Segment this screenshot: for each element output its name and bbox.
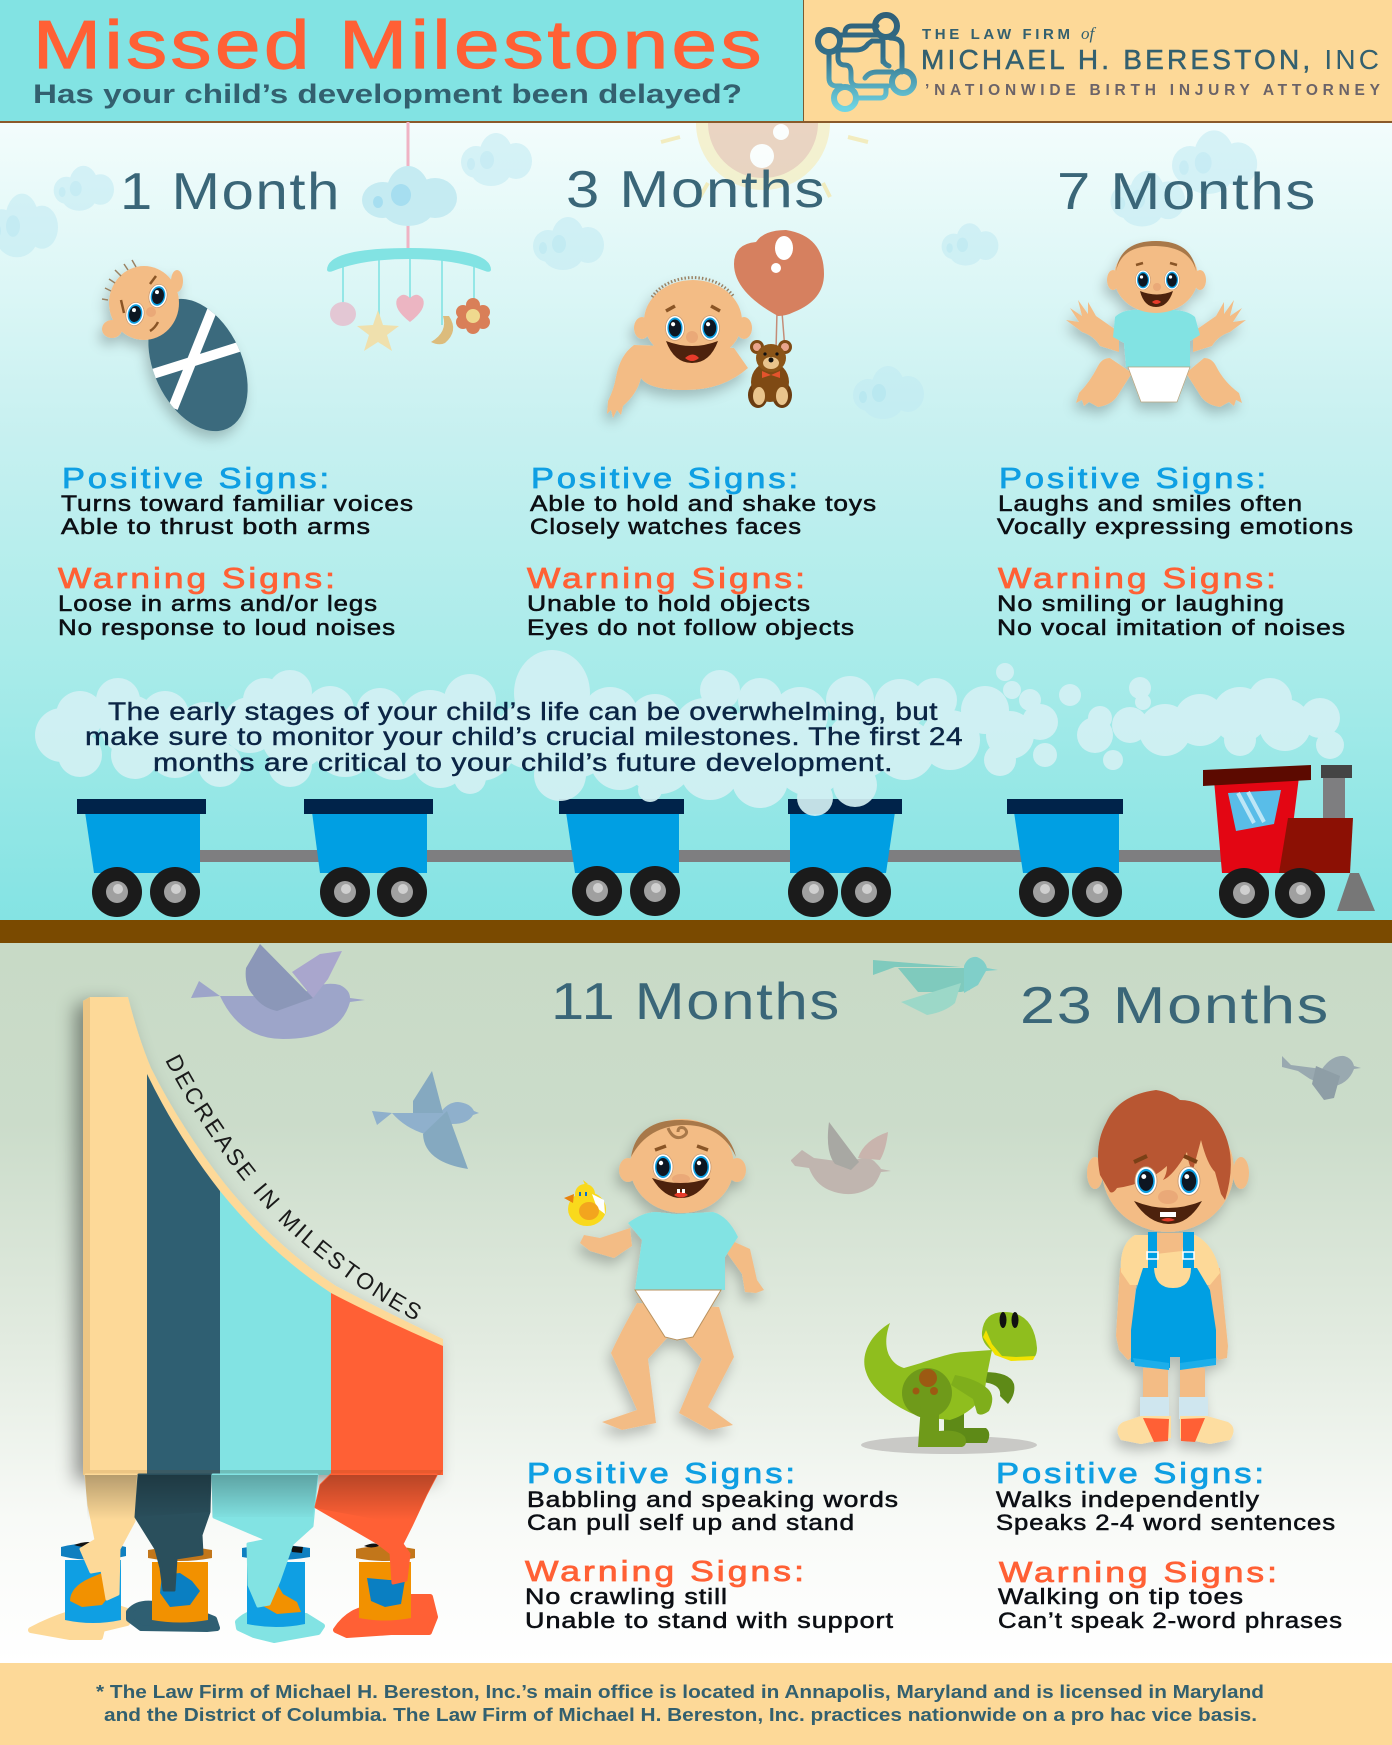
text block: 7 month signs: Laughs and smiles often <box>998 491 1303 516</box>
train car 2 <box>304 799 433 917</box>
text block: 11 month signs: Can pull self up and stand <box>527 1510 855 1535</box>
train car 5 <box>1007 799 1123 917</box>
footer panel <box>0 1663 1392 1745</box>
icon: rubber duck <box>564 1180 606 1226</box>
hip and spots <box>902 1368 952 1418</box>
cream bevel <box>83 997 147 1475</box>
footer panel: and the District of Columbia. The Law Firm of Michael H. Bereston, Inc. practices nationwide on a pro hac vice basis. <box>104 1704 1257 1725</box>
front arm <box>951 1375 992 1415</box>
ground band <box>0 920 1392 943</box>
text block: early stages paragraph: The early stages of your child’s life can be overwhelming, but <box>108 698 938 726</box>
text block: 23 month signs: Warning Signs: <box>999 1557 1280 1589</box>
text block: 1 month signs: Able to thrust both arms <box>61 514 371 539</box>
head <box>1107 241 1206 313</box>
head <box>634 278 752 363</box>
subtitle: Has your child’s development been delayed? <box>33 79 742 109</box>
text block: 7 month signs: No vocal imitation of noises <box>997 615 1346 640</box>
heading: 3 months: 3 Months <box>566 161 826 219</box>
head and hair <box>1087 1090 1249 1232</box>
text block: 3 month signs: Positive Signs: <box>531 463 801 495</box>
body and tail <box>864 1323 992 1420</box>
shirt <box>1113 310 1200 367</box>
text block: 3 month signs: Warning Signs: <box>527 563 808 595</box>
icon: balloon <box>734 230 824 350</box>
bucket 1 <box>61 1542 126 1623</box>
text block: early stages paragraph: months are critical to your child’s future development. <box>153 749 893 777</box>
text block: 7 month signs: Warning Signs: <box>998 563 1279 595</box>
text block: 23 month signs: Positive Signs: <box>996 1458 1267 1490</box>
text block: 23 month signs: Speaks 2-4 word sentences <box>996 1510 1336 1535</box>
shadow <box>861 1436 1037 1454</box>
illustration: 7 month baby <box>1066 241 1246 407</box>
text block: 1 month signs: No response to loud noises <box>58 615 396 640</box>
train car 1 <box>77 799 206 917</box>
chart: decrease in milestones <box>63 992 447 1493</box>
text block: 1 month signs: Turns toward familiar voices <box>61 491 414 516</box>
background clouds <box>0 130 1257 419</box>
illustration: swaddled 1 month baby <box>102 260 267 447</box>
text block: 11 month signs: No crawling still <box>525 1584 728 1609</box>
footer disclaimer: * The Law Firm of Michael H. Bereston, Inc.’s main office is located in Annapolis, Maryland and is licensed in Maryland <box>96 1681 1264 1702</box>
icon: purple bird <box>191 944 365 1039</box>
sky decorations: sun and clouds <box>0 123 1257 419</box>
text block: 3 month signs: Able to hold and shake toys <box>530 491 877 516</box>
legs <box>602 1303 734 1430</box>
legs <box>1076 358 1242 407</box>
text block: early stages paragraph <box>85 698 963 777</box>
illustration: 3 month baby <box>607 278 752 418</box>
bucket 2 <box>148 1547 212 1622</box>
text block: 7 month signs: Positive Signs: <box>999 463 1269 495</box>
heading: 11 months: 11 Months <box>551 973 841 1031</box>
locomotive <box>1203 765 1375 918</box>
text block: 3 month signs <box>527 463 877 640</box>
text block: 3 month signs: Closely watches faces <box>530 514 802 539</box>
smoke cloud <box>35 650 1344 816</box>
header divider <box>803 0 804 122</box>
text block: early stages paragraph: make sure to monitor your child’s crucial milestones. The first 24 <box>85 723 963 751</box>
coupling bar <box>195 850 1235 862</box>
icon: pink grey bird <box>791 1122 891 1194</box>
firm name italic of: of <box>1081 24 1096 43</box>
icon: logo knot <box>818 15 914 109</box>
curved label <box>165 1060 418 1322</box>
text block: 7 month signs: No smiling or laughing <box>997 591 1285 616</box>
text block: 3 month signs: Eyes do not follow objects <box>527 615 855 640</box>
icon: grey bird <box>1282 1056 1361 1100</box>
text block: 3 month signs: Unable to hold objects <box>527 591 811 616</box>
heading: 23 months: 23 Months <box>1020 977 1330 1035</box>
text block: 1 month signs: Loose in arms and/or legs <box>58 591 378 616</box>
icon: teal bird <box>873 957 998 1015</box>
arms and hands <box>1066 300 1246 352</box>
arms <box>1116 1268 1228 1360</box>
diaper <box>1128 367 1190 402</box>
paint buckets <box>31 1475 437 1640</box>
arms <box>580 1228 632 1258</box>
head <box>619 1119 746 1213</box>
firm tagline: ’NATIONWIDE BIRTH INJURY ATTORNEY <box>925 82 1381 99</box>
background: lower section panel <box>0 943 1392 1664</box>
bucket 4 <box>356 1544 415 1620</box>
header: law firm logo panel <box>804 0 1392 122</box>
illustration: 23 month boy <box>1087 1090 1249 1444</box>
chart: decrease in milestones: DECREASE IN MILESTONES <box>166 1054 421 1319</box>
head <box>982 1312 1037 1360</box>
heading: 1 month: 1 Month <box>120 163 341 221</box>
text block: 7 month signs: Vocally expressing emotions <box>997 514 1354 539</box>
bucket 3 <box>242 1545 310 1627</box>
icon: teddy bear <box>748 340 792 408</box>
lip shading <box>147 1470 220 1475</box>
text block: 1 month signs <box>58 463 414 640</box>
illustration: toy dinosaur <box>861 1312 1037 1454</box>
text block: 11 month signs: Positive Signs: <box>527 1458 798 1490</box>
header: title panel <box>0 0 804 122</box>
teeth <box>983 1330 1035 1361</box>
overalls <box>1131 1232 1216 1370</box>
column: cyan <box>220 1191 331 1475</box>
column body with shadow <box>83 997 443 1475</box>
back arm and leg <box>944 1372 1014 1443</box>
text block: 23 month signs: Walks independently <box>996 1487 1260 1512</box>
legs and socks <box>1143 1368 1205 1398</box>
eyes <box>1000 1312 1006 1328</box>
front leg <box>918 1405 966 1447</box>
head <box>102 260 183 340</box>
text block: 11 month signs: Babbling and speaking words <box>527 1487 899 1512</box>
paint drips <box>81 1475 437 1606</box>
body and arm <box>607 345 748 418</box>
text block: 23 month signs <box>996 1458 1343 1633</box>
background: top sky panel <box>0 122 1392 920</box>
text block: 11 month signs: Warning Signs: <box>525 1556 807 1588</box>
firm name line 1: THE LAW FIRM <box>922 26 1070 43</box>
train car 3 <box>559 799 684 916</box>
text block: 23 month signs: Can’t speak 2-word phrases <box>998 1608 1343 1633</box>
shoes <box>1117 1416 1234 1444</box>
text block: 1 month signs: Warning Signs: <box>58 563 338 595</box>
swaddle <box>140 298 250 444</box>
icon: sun <box>661 123 868 197</box>
illustration: train <box>77 765 1375 918</box>
puddles <box>31 1597 435 1640</box>
text block: 11 month signs <box>525 1458 899 1633</box>
text block: 1 month signs: Positive Signs: <box>62 463 332 495</box>
title: Missed Milestones <box>33 7 765 83</box>
icon: baby mobile <box>327 122 491 351</box>
shirt <box>1121 1235 1220 1285</box>
icon: blue bird <box>372 1071 479 1169</box>
text block: 11 month signs: Unable to stand with support <box>525 1608 894 1633</box>
heading: 7 months: 7 Months <box>1057 163 1317 221</box>
column: dark teal <box>147 1074 220 1475</box>
text block: 7 month signs <box>997 463 1354 640</box>
column: orange <box>331 1293 443 1475</box>
diaper <box>635 1290 721 1340</box>
firm name line 2: MICHAEL H. BERESTON, INC <box>921 44 1379 75</box>
train car 4 <box>788 799 902 917</box>
shirt <box>628 1212 738 1290</box>
illustration: 11 month baby <box>580 1119 764 1430</box>
text block: 23 month signs: Walking on tip toes <box>998 1584 1244 1609</box>
